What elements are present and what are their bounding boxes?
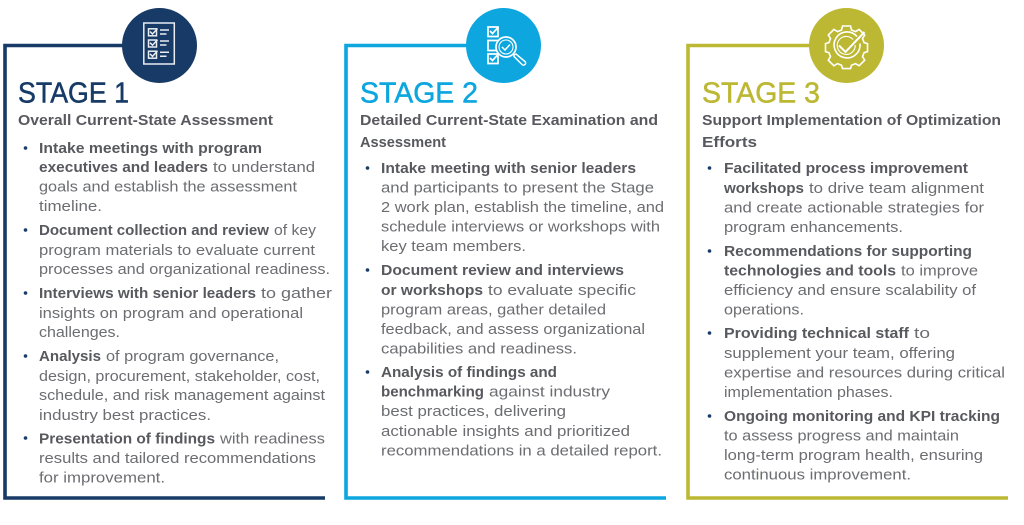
- bullet item: intake meetings: Intake meetings with program: [39, 140, 262, 157]
- bullet item: presentation: for improvement.: [39, 470, 165, 486]
- bullet item: recommendations: to improve: [901, 262, 978, 280]
- bullet item: recommendations: [708, 243, 978, 318]
- bullet item: intake meeting: 2 work plan, establish the timeline, and: [381, 199, 664, 216]
- bullet item: document review: program areas, gather detailed: [381, 302, 606, 318]
- subtitle: stage 2: Detailed Current-State Examination and: [360, 112, 658, 129]
- heading: stage 3: STAGE 3: [702, 78, 820, 110]
- bullet item: analysis: of program governance,: [106, 348, 279, 365]
- panel: stage 3: [688, 8, 1008, 498]
- bullet item: analysis of findings: recommendations in a detailed report.: [381, 442, 662, 460]
- subtitle: stage 1: Overall Current-State Assessment: [18, 112, 273, 129]
- bullet item: interviews: [24, 285, 332, 341]
- bullet item: analysis: [24, 348, 326, 424]
- bullet item: technical staff: expertise and resources during critical: [724, 364, 1005, 382]
- subtitle: stage 2: [360, 112, 658, 151]
- bullet item: technical staff: Providing technical staff: [724, 325, 910, 342]
- bullet item: intake meetings: timeline.: [39, 198, 102, 215]
- bullet item: process improvement: program enhancements.: [724, 219, 903, 236]
- bullet list: stage 1: [24, 140, 332, 486]
- icon: checklist on navy circle: [122, 8, 197, 83]
- bullet item: process improvement: [708, 160, 985, 236]
- bullet item: presentation: Presentation of findings: [39, 430, 215, 448]
- bullet item: process improvement: workshops: [723, 180, 804, 197]
- bullet item: recommendations: efficiency and ensure scalability of: [724, 282, 977, 299]
- bullet item: document review: feedback, and assess organizational: [381, 321, 645, 338]
- bullet item: intake meeting: Intake meeting with senior leaders: [381, 160, 636, 177]
- bullet item: monitoring: to assess progress and maintain: [724, 428, 959, 444]
- bullet item: document collection: [24, 222, 330, 278]
- bullet item: monitoring: long-term program health, ensuring: [724, 447, 983, 464]
- bullet item: interviews: to gather: [261, 285, 332, 302]
- bullet item: intake meetings: executives and leaders: [39, 159, 208, 176]
- bullet item: intake meetings: [24, 140, 315, 215]
- bullet item: technical staff: [708, 325, 1005, 401]
- bullet item: analysis of findings: [366, 364, 662, 460]
- bullet item: intake meeting: schedule interviews or workshops with: [381, 218, 660, 236]
- subtitle: stage 3: Efforts: [702, 134, 757, 151]
- bullet item: interviews: challenges.: [39, 324, 120, 341]
- bullet item: presentation: [24, 430, 325, 486]
- bullet item: process improvement: Facilitated process improvement: [724, 160, 968, 177]
- subtitle: stage 3: [702, 112, 1001, 151]
- bullet item: document review: capabilities and readiness.: [381, 340, 577, 358]
- heading: stage 1: STAGE 1: [18, 78, 129, 110]
- bullet item: monitoring: [708, 408, 1000, 484]
- panel: stage 2: [346, 8, 666, 498]
- frame: stage 1: [5, 46, 325, 498]
- bullet item: document review: or workshops: [381, 282, 483, 299]
- bullet item: analysis: schedule, and risk management against: [39, 387, 326, 404]
- bullet item: analysis: design, procurement, stakeholder, cost,: [39, 368, 320, 385]
- bullet item: analysis of findings: against industry: [489, 384, 610, 400]
- subtitle: stage 2: Assessment: [360, 134, 446, 151]
- bullet item: intake meeting: key team members.: [381, 238, 526, 255]
- bullet item: analysis of findings: best practices, delivering: [381, 403, 566, 420]
- bullet list: stage 2: [366, 160, 664, 460]
- bullet item: technical staff: supplement your team, offering: [724, 345, 955, 362]
- bullet item: document collection: program materials to evaluate current: [39, 242, 316, 259]
- bullet item: analysis: industry best practices.: [39, 407, 211, 424]
- bullet item: document review: to evaluate specific: [488, 282, 636, 299]
- bullet item: intake meetings: to understand: [213, 159, 315, 176]
- bullet item: interviews: Interviews with senior leaders: [39, 285, 256, 302]
- panel: stage 1: [5, 8, 332, 498]
- bullet item: monitoring: Ongoing monitoring and KPI tracking: [724, 408, 1000, 425]
- bullet item: analysis of findings: actionable insights and prioritized: [381, 423, 630, 440]
- bullet item: intake meeting: [366, 160, 664, 255]
- icon: gear with check on olive circle: [809, 8, 884, 83]
- bullet item: recommendations: Recommendations for supporting: [724, 243, 972, 260]
- bullet item: document collection: of key: [274, 222, 316, 239]
- bullet item: document review: Document review and interviews: [381, 262, 624, 279]
- bullet item: intake meetings: goals and establish the assessment: [39, 178, 298, 196]
- bullet item: presentation: results and tailored recommendations: [39, 450, 316, 467]
- icon: checklist with magnifier on blue circle: [466, 8, 541, 83]
- bullet item: monitoring: continuous improvement.: [724, 466, 911, 484]
- frame: stage 3: [688, 46, 1008, 498]
- bullet item: document review: [366, 262, 645, 358]
- bullet item: analysis of findings: benchmarking: [381, 384, 484, 400]
- heading: stage 2: STAGE 2: [360, 78, 478, 110]
- bullet item: recommendations: operations.: [724, 302, 804, 318]
- bullet item: technical staff: to: [914, 325, 930, 342]
- frame: stage 2: [346, 46, 666, 498]
- bullet item: process improvement: to drive team alignment: [809, 180, 985, 197]
- bullet item: analysis of findings: Analysis of findings and: [381, 364, 557, 381]
- subtitle: stage 3: Support Implementation of Optimization: [702, 112, 1001, 129]
- bullet item: process improvement: and create actionable strategies for: [724, 200, 984, 216]
- bullet item: document collection: Document collection and review: [39, 222, 269, 239]
- bullet item: recommendations: technologies and tools: [724, 262, 896, 280]
- bullet item: technical staff: implementation phases.: [724, 384, 893, 401]
- bullet item: analysis: Analysis: [39, 348, 101, 365]
- bullet item: interviews: insights on program and operational: [39, 305, 303, 322]
- bullet item: intake meeting: and participants to present the Stage: [381, 180, 654, 196]
- bullet item: presentation: with readiness: [219, 430, 325, 448]
- bullet list: stage 3: [708, 160, 1005, 484]
- bullet item: document collection: processes and organizational readiness.: [39, 261, 330, 278]
